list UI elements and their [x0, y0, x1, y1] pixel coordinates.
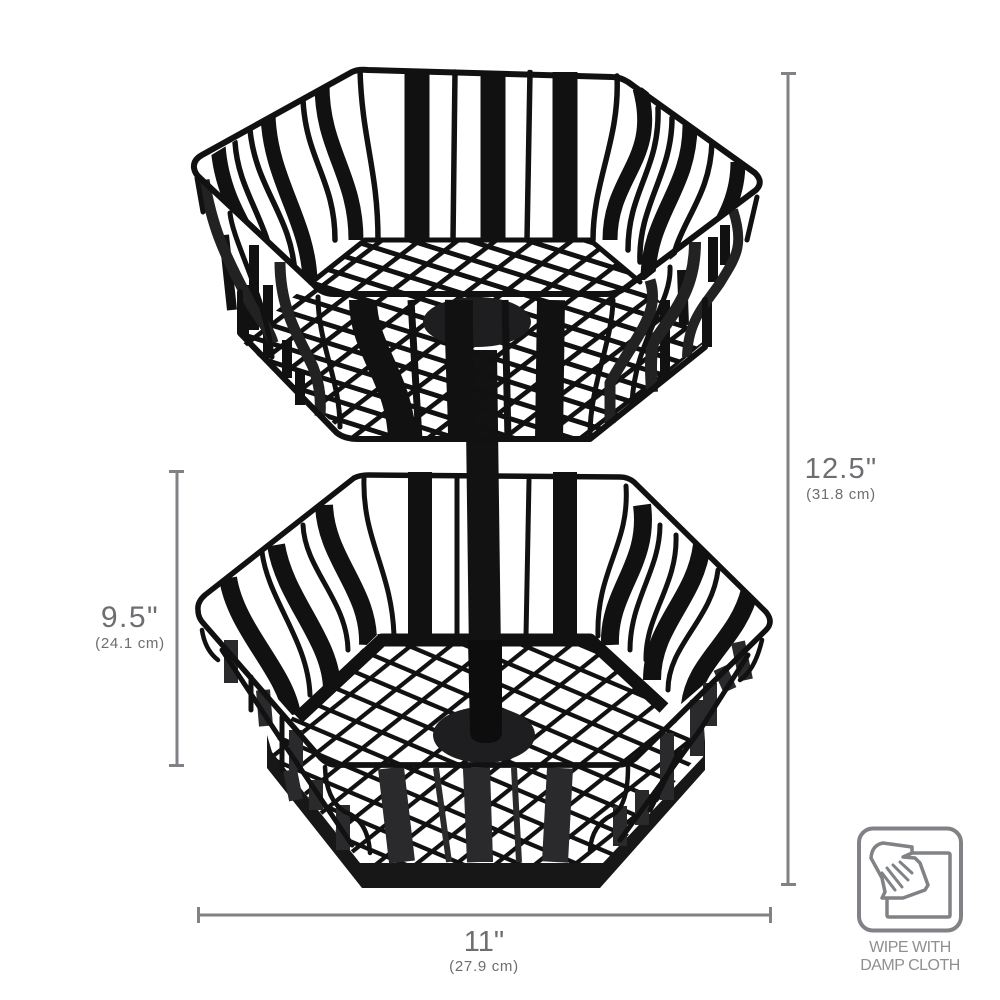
- center post: [465, 350, 502, 743]
- clearance label: [95, 601, 165, 652]
- clearance label: 9.5": [101, 601, 159, 634]
- care instruction caption: DAMP CLOTH: [860, 957, 960, 974]
- height label: [805, 453, 877, 503]
- height label: (31.8 cm): [806, 486, 876, 503]
- clearance label: (24.1 cm): [95, 635, 165, 652]
- lower basket side strips: [202, 630, 762, 853]
- icon: wipe with damp cloth: [859, 828, 961, 930]
- upper basket left side strips: [197, 178, 340, 427]
- lower basket rim: [198, 475, 770, 765]
- lower basket floor grid: [270, 634, 703, 864]
- width dimension line 11 in: [198, 907, 771, 923]
- height label: 12.5": [805, 453, 877, 485]
- width label: 11": [464, 926, 504, 958]
- upper clearance dimension line 9.5 in: [169, 471, 184, 766]
- lower basket base plate: [267, 727, 705, 888]
- upper basket: [194, 70, 760, 440]
- width label: [449, 926, 519, 975]
- upper basket rim: [194, 70, 760, 294]
- upper floor back edge: [312, 240, 640, 282]
- upper mounting disc: [423, 297, 531, 347]
- upper basket right side strips: [590, 197, 757, 435]
- lower floor dark edge: [298, 640, 664, 718]
- lower basket front strips: [391, 768, 560, 862]
- lower basket: [198, 472, 770, 888]
- care instruction caption: [860, 939, 960, 974]
- repeated lower front strips under disc: [463, 768, 493, 862]
- upper basket floor grid: [240, 238, 705, 438]
- post tip over disc: [468, 640, 502, 743]
- upper basket back strips: [218, 70, 738, 285]
- upper basket bottom rail: [240, 292, 705, 439]
- care instruction caption: WIPE WITH: [869, 939, 951, 956]
- product diagram with dimensions: [96, 66, 963, 974]
- lower mounting disc: [433, 707, 535, 763]
- width label: (27.9 cm): [449, 958, 519, 975]
- upper basket front strips: [363, 300, 551, 440]
- lower basket back strips: [228, 472, 750, 715]
- height dimension line 12.5 in: [781, 73, 796, 885]
- lower front rail over disc: [336, 762, 618, 768]
